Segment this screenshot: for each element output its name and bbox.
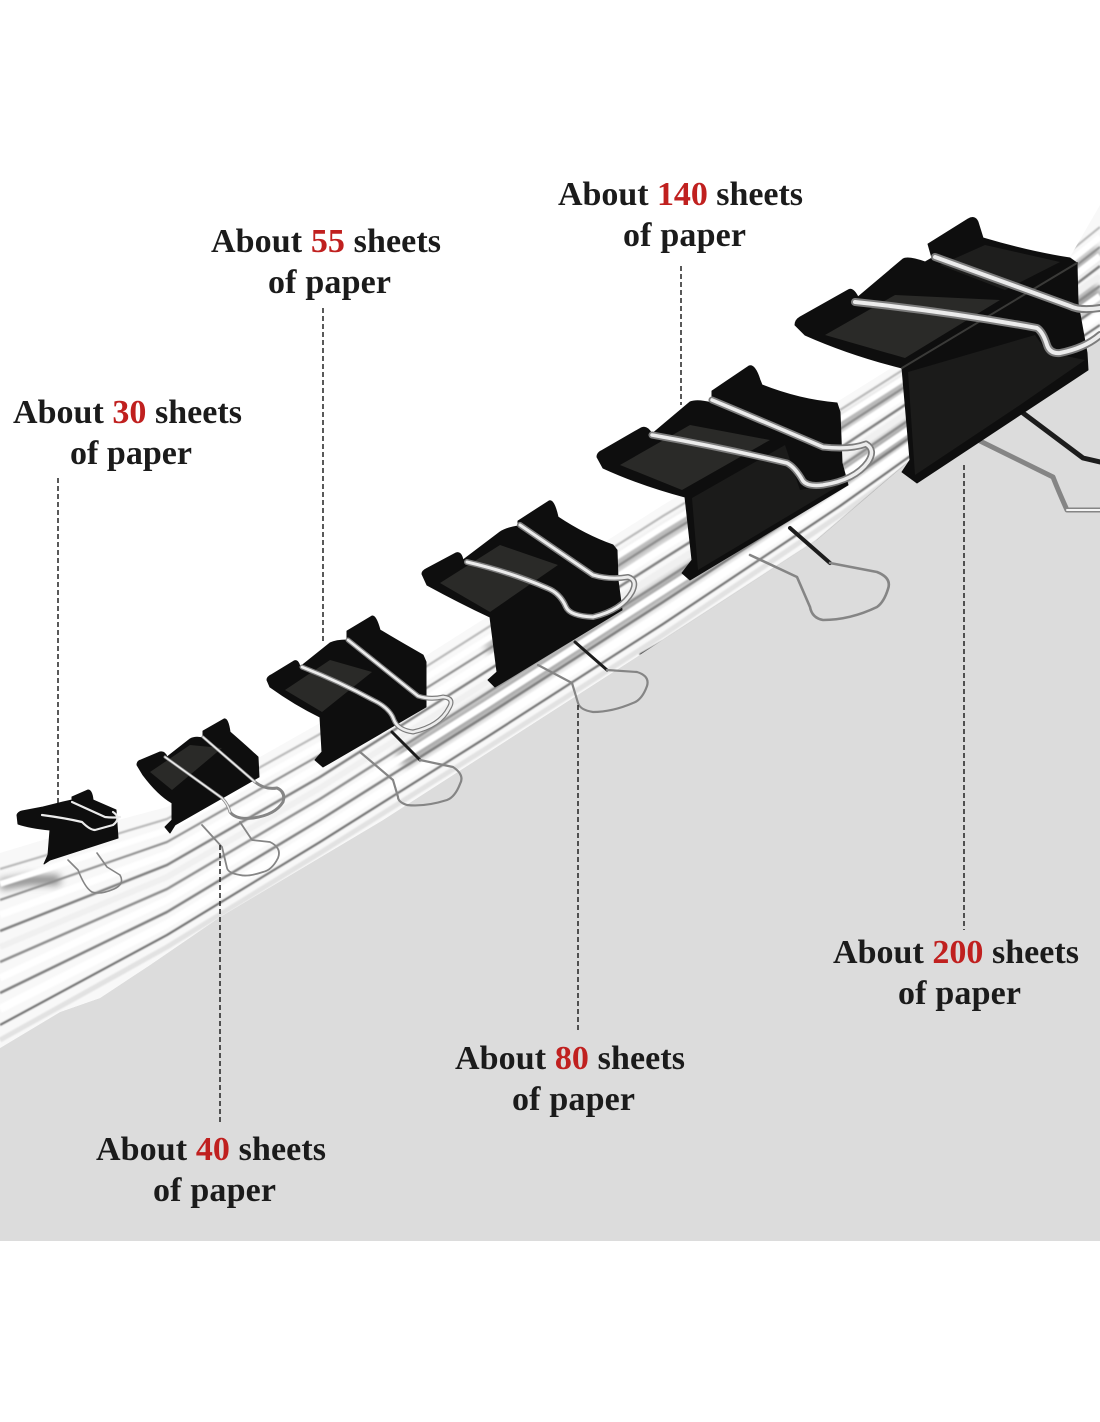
binder clip: 40 sheets — [137, 719, 284, 876]
binder clip: 140 sheets — [597, 366, 889, 620]
label: 55 sheets: About 55 sheets — [211, 223, 441, 260]
clip body — [267, 616, 426, 767]
label: 200 sheets: of paper — [898, 975, 1021, 1012]
clip handle — [790, 528, 830, 563]
label: 55 sheets: of paper — [268, 264, 391, 301]
label: 30 sheets: of paper — [70, 435, 192, 472]
clip top plate — [440, 545, 558, 612]
clip wire — [42, 802, 120, 830]
label: 40 sheets — [96, 1131, 326, 1209]
dotted leader: 200 sheets — [963, 465, 965, 930]
clip body front — [908, 335, 1085, 475]
binder clip: 200 sheets — [795, 218, 1100, 510]
clip body — [597, 366, 848, 580]
infographic: binder clip sizes and sheet capacity — [0, 182, 1100, 1241]
binder clip: 30 sheets — [17, 790, 122, 893]
clip body — [795, 218, 1088, 483]
dotted leader: 55 sheets — [322, 308, 324, 641]
label: 200 sheets — [833, 934, 1079, 1012]
clip wire — [855, 257, 1100, 353]
clip spine — [902, 263, 1077, 368]
clip handle — [202, 822, 279, 876]
clip wire — [467, 525, 634, 617]
clip top plate — [825, 295, 1000, 358]
label: 55 sheets — [211, 223, 441, 301]
label: 30 sheets — [13, 394, 242, 472]
clip body — [422, 501, 622, 687]
label: 80 sheets: of paper — [512, 1081, 635, 1118]
binder clip: 55 sheets — [267, 616, 461, 805]
label: 140 sheets: About 140 sheets — [558, 176, 803, 213]
label: 40 sheets: of paper — [153, 1172, 276, 1209]
clip body front — [692, 445, 845, 570]
dotted leader: 140 sheets — [680, 266, 682, 405]
clip handle — [575, 642, 607, 670]
dotted leader: 80 sheets — [577, 705, 579, 1030]
clip body — [137, 719, 259, 833]
grey backdrop panel — [0, 340, 1100, 1241]
label: 80 sheets: About 80 sheets — [455, 1040, 685, 1077]
label: 30 sheets: About 30 sheets — [13, 394, 242, 431]
label: 40 sheets: About 40 sheets — [96, 1131, 326, 1168]
clip top plate — [150, 745, 222, 790]
label: 80 sheets — [455, 1040, 685, 1118]
binder clip: 80 sheets — [422, 501, 648, 712]
clip wire — [652, 400, 872, 486]
clip top plate — [620, 425, 770, 490]
label: 140 sheets: of paper — [623, 217, 746, 254]
stack of paper — [0, 225, 1100, 1043]
clip handle — [68, 853, 122, 893]
clip wire — [302, 640, 451, 732]
dotted leader: 40 sheets — [219, 845, 221, 1124]
label: 140 sheets — [558, 176, 803, 254]
clip rear plate — [940, 245, 1060, 290]
clip handle — [392, 732, 420, 760]
clip wire — [165, 737, 284, 818]
clip handle — [1023, 413, 1100, 462]
label: 200 sheets: About 200 sheets — [833, 934, 1079, 971]
clip top plate — [285, 660, 372, 712]
dotted leader: 30 sheets — [57, 478, 59, 803]
clip body — [17, 790, 118, 864]
